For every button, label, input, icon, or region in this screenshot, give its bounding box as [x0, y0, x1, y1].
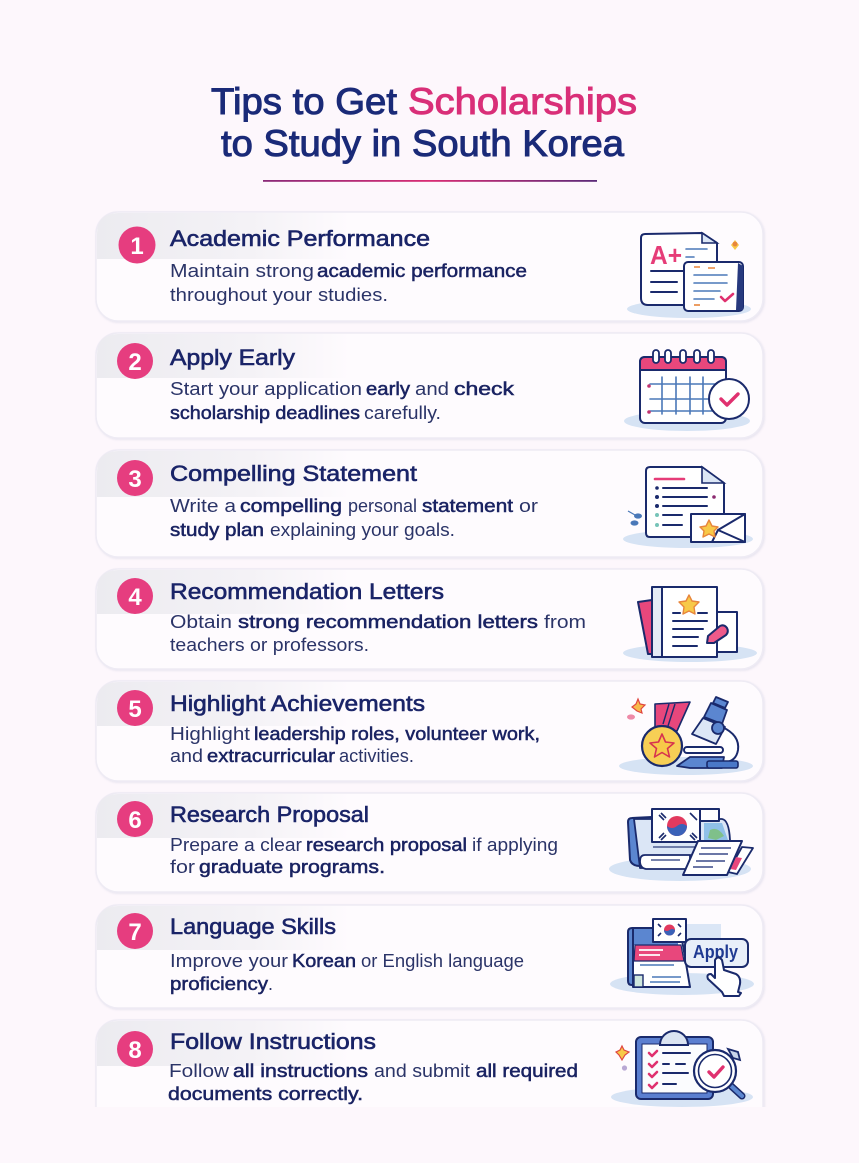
number badge 2: 2: [128, 349, 142, 376]
panel: tip 1 academic performance: [96, 212, 763, 321]
description 8: documents correctly.: [168, 1084, 363, 1104]
description 3: Write a: [170, 496, 237, 516]
description 5: and: [170, 746, 203, 766]
panel: tip 6 research proposal: [96, 793, 763, 892]
description 5: [170, 724, 540, 766]
heading 5: Highlight Achievements: [170, 691, 425, 716]
description 5: Highlight: [170, 724, 250, 744]
description 3: study plan: [170, 520, 264, 540]
number badge 3: 3: [128, 466, 142, 493]
description 6: graduate programs.: [199, 857, 385, 877]
description 5: extracurricular: [207, 746, 335, 766]
description 7: [170, 951, 524, 994]
title: [211, 81, 637, 164]
number badge 5: [117, 690, 153, 726]
number badge 1: [118, 226, 156, 264]
description 8: [168, 1061, 578, 1104]
description 6: research proposal: [306, 835, 467, 855]
description 8: and submit: [374, 1061, 470, 1081]
heading 3: Compelling Statement: [170, 461, 417, 486]
description 3: explaining your goals.: [270, 520, 455, 540]
description 4: from: [544, 612, 586, 632]
description 8: all instructions: [233, 1061, 368, 1081]
description 5: activities.: [339, 746, 414, 766]
icon: book with Korean flag: [609, 809, 753, 881]
title: Scholarships: [408, 81, 637, 122]
number badge 4: [117, 578, 153, 614]
icon: apply button and form: [610, 919, 754, 996]
panel: tip 5 highlight achievements: [96, 681, 763, 781]
description 1: [170, 261, 527, 305]
number badge 4: 4: [128, 584, 142, 611]
icon: medal and microscope: [619, 697, 753, 775]
description 3: [170, 496, 538, 540]
panel: tip 7 language skills: [96, 905, 763, 1008]
heading 4: Recommendation Letters: [170, 579, 444, 604]
description 3: compelling: [240, 496, 342, 516]
description 4: strong recommendation letters: [238, 612, 538, 632]
description 6: [170, 835, 558, 877]
description 2: carefully.: [364, 403, 441, 423]
description 1: throughout your studies.: [170, 285, 388, 305]
panel: tip 3 compelling statement: [96, 450, 763, 557]
heading 2: Apply Early: [170, 345, 295, 370]
description 2: Start your application: [170, 379, 362, 399]
icon: graded documents: A+: [650, 240, 682, 270]
title: Tips to Get: [211, 81, 398, 122]
description 7: or English language: [361, 951, 524, 971]
number badge 7: 7: [128, 919, 142, 946]
description 7: Korean: [292, 951, 356, 971]
apply label: Apply: [693, 942, 738, 962]
number badge 7: [117, 913, 153, 949]
heading 6: Research Proposal: [170, 802, 369, 827]
panel: tip 4 recommendation letters: [96, 569, 763, 669]
number badge 3: [117, 460, 153, 496]
description 6: Prepare a clear: [170, 835, 302, 855]
icon: graded documents: [627, 233, 751, 318]
description 4: [170, 612, 586, 655]
icon: calendar with check: [624, 350, 750, 431]
number badge 6: 6: [128, 807, 142, 834]
number badge 8: [117, 1031, 153, 1067]
heading 1: Academic Performance: [170, 226, 430, 251]
description 7: Improve your: [170, 951, 288, 971]
description 5: leadership roles, volunteer work,: [254, 724, 540, 744]
description 6: if applying: [472, 835, 558, 855]
description 3: statement: [422, 496, 513, 516]
description 4: Obtain: [170, 612, 232, 632]
description 8: all required: [476, 1061, 578, 1081]
description 2: early: [366, 379, 410, 399]
number badge 1: 1: [130, 233, 144, 260]
description 7: proficiency: [170, 974, 268, 994]
title divider: [263, 180, 597, 182]
heading 7: Language Skills: [170, 914, 336, 939]
infographic: [95, 86, 765, 1107]
panel: tip 8 follow instructions: [95, 1019, 765, 1107]
description 1: academic performance: [317, 261, 527, 281]
description 8: Follow: [169, 1061, 230, 1081]
description 2: [170, 379, 515, 423]
description 2: check: [454, 379, 515, 399]
panel: tip 2 apply early: [96, 333, 763, 438]
description 3: personal: [348, 496, 417, 516]
description 1: Maintain strong: [170, 261, 314, 281]
description 6: for: [170, 857, 195, 877]
icon: recommendation letter: [623, 587, 757, 662]
number badge 5: 5: [128, 696, 142, 723]
title: to Study in South Korea: [221, 123, 624, 164]
description 2: scholarship deadlines: [170, 403, 360, 423]
number badge 2: [117, 343, 153, 379]
icon: checklist with magnifier: [611, 1031, 753, 1107]
description 3: or: [519, 496, 538, 516]
number badge 6: [117, 801, 153, 837]
heading 8: Follow Instructions: [170, 1029, 376, 1054]
description 7: .: [268, 974, 273, 994]
number badge 8: 8: [128, 1037, 142, 1064]
description 2: and: [415, 379, 449, 399]
icon: document and envelope: [623, 467, 753, 548]
description 4: teachers or professors.: [170, 635, 369, 655]
